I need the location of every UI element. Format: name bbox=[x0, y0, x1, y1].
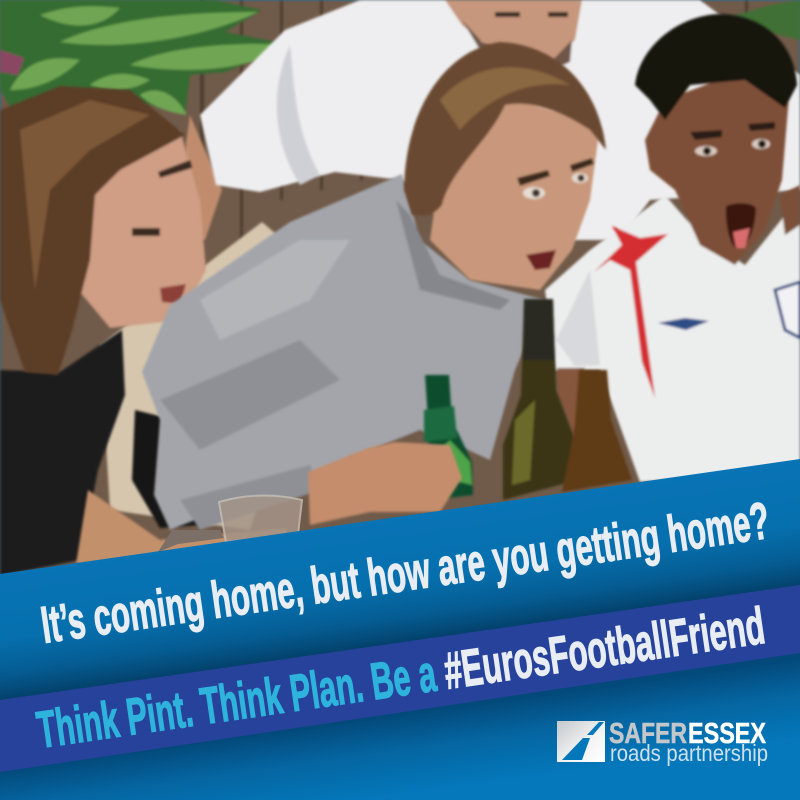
left man's black t-shirt bbox=[0, 330, 125, 576]
green bottle bbox=[420, 375, 473, 500]
umbro logo bbox=[658, 318, 709, 330]
brown bottle bbox=[562, 370, 632, 492]
right man's hair bbox=[635, 14, 797, 120]
right man's eyes and open mouth bbox=[690, 122, 775, 140]
plants bbox=[0, 0, 800, 115]
england badge bbox=[775, 282, 800, 338]
panel: dark blue stripe bbox=[0, 585, 800, 772]
man at the back in white shirt bbox=[200, 0, 800, 240]
wine bottle bbox=[503, 299, 575, 500]
top man's face bbox=[445, 0, 582, 68]
logo text: safer: SAFER bbox=[609, 718, 687, 750]
panel: lower blue area bbox=[0, 650, 800, 800]
right man's face bbox=[645, 72, 790, 265]
top man's arm bbox=[185, 115, 222, 240]
red cross on shirt bbox=[594, 226, 668, 398]
blue panel: lower banner area bbox=[0, 459, 800, 800]
bracelets bbox=[158, 530, 224, 552]
left man's arm bbox=[76, 490, 290, 564]
icon: road in white square bbox=[557, 721, 605, 762]
grey sweatshirt bbox=[142, 174, 545, 530]
panel: upper blue stripe bbox=[0, 459, 800, 705]
glass tumbler bbox=[219, 495, 302, 542]
photo background: wooden fence bbox=[0, 0, 800, 580]
black clothing under sweater bbox=[132, 410, 200, 528]
logo text: roads partnership: roads partnership bbox=[610, 740, 768, 766]
right man's hand bbox=[780, 185, 800, 235]
hand gripping bottle bbox=[308, 442, 462, 525]
centre man's head bbox=[404, 42, 606, 290]
photo: four football fans watching bbox=[0, 0, 800, 580]
forearm bbox=[557, 368, 585, 440]
logo text: essex: ESSEX bbox=[688, 718, 767, 750]
sofa bbox=[100, 222, 330, 530]
logo: safer essex roads partnership bbox=[557, 718, 768, 766]
man in England shirt bbox=[545, 14, 800, 482]
tagline: think pint, think plan: Think Pint. Think Plan. Be a bbox=[33, 645, 440, 760]
left man's head bbox=[0, 86, 206, 375]
England shirt bbox=[545, 190, 800, 482]
